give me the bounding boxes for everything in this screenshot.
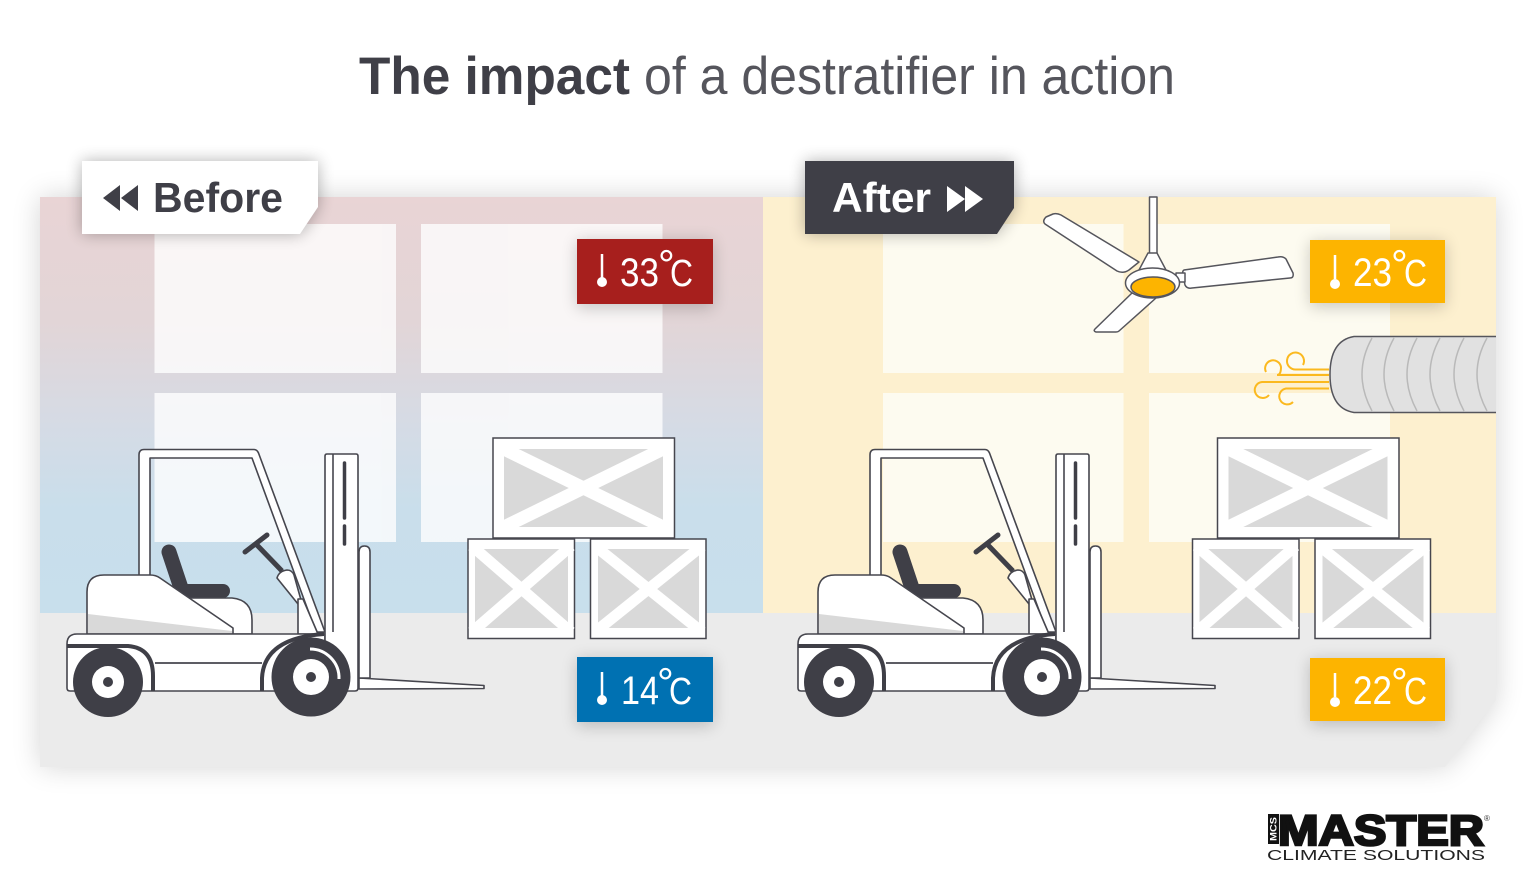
temperature tag: 22: ° bbox=[1391, 659, 1408, 706]
before text: Before bbox=[153, 174, 283, 221]
temperature tag: 14: ° bbox=[657, 659, 674, 706]
temperature tag: 14 bbox=[577, 657, 713, 722]
title continuation: of a destratifier in action bbox=[644, 47, 1175, 106]
logo mcs block bbox=[1268, 814, 1279, 844]
ceiling fan bbox=[1044, 197, 1293, 332]
before label shadow bbox=[82, 161, 318, 234]
temperature tag: 14: 14 bbox=[621, 669, 659, 713]
temperature tag: 33 bbox=[577, 239, 713, 304]
forklift before bbox=[67, 450, 484, 717]
temperature tag: 23 bbox=[1310, 240, 1445, 303]
temperature tag: 22: 22 bbox=[1353, 669, 1392, 713]
forklift after bbox=[798, 450, 1215, 717]
icon: air flow bbox=[1255, 353, 1329, 404]
title: The impact bbox=[359, 47, 630, 106]
tag shadows bbox=[577, 241, 1445, 726]
temperature tag: 33: C bbox=[670, 253, 693, 295]
windows after bbox=[883, 224, 1390, 542]
windows before bbox=[154, 224, 662, 542]
temperature tag: 22: C bbox=[1404, 671, 1427, 713]
logo: MCS bbox=[1268, 817, 1278, 841]
badge: after bbox=[805, 161, 1014, 234]
boxes after bbox=[1192, 438, 1430, 638]
logo registered mark: ® bbox=[1484, 814, 1490, 823]
duct bbox=[1330, 336, 1496, 412]
icon: rewind bbox=[103, 185, 138, 211]
after text: After bbox=[832, 174, 931, 221]
boxes before bbox=[468, 438, 706, 638]
after label shadow bbox=[805, 161, 1014, 234]
temperature tag: 22 bbox=[1310, 658, 1445, 721]
logo master: MASTER bbox=[1278, 807, 1484, 855]
badge: before bbox=[82, 161, 318, 234]
logo bbox=[1267, 807, 1490, 864]
panel shadow bbox=[40, 197, 1496, 767]
temperature tag: 33: 33 bbox=[620, 251, 659, 295]
temperature tag: 33: ° bbox=[658, 241, 675, 288]
icon: fast forward bbox=[947, 186, 983, 212]
temperature tag: 14: C bbox=[669, 671, 692, 713]
logo subtitle: CLIMATE SOLUTIONS bbox=[1267, 847, 1485, 864]
temperature tag: 23: C bbox=[1404, 253, 1427, 295]
temperature tag: 23: 23 bbox=[1353, 251, 1392, 295]
temperature tag: 23: ° bbox=[1391, 241, 1408, 288]
panel: before bbox=[40, 197, 763, 767]
panel: after bbox=[763, 197, 1496, 767]
